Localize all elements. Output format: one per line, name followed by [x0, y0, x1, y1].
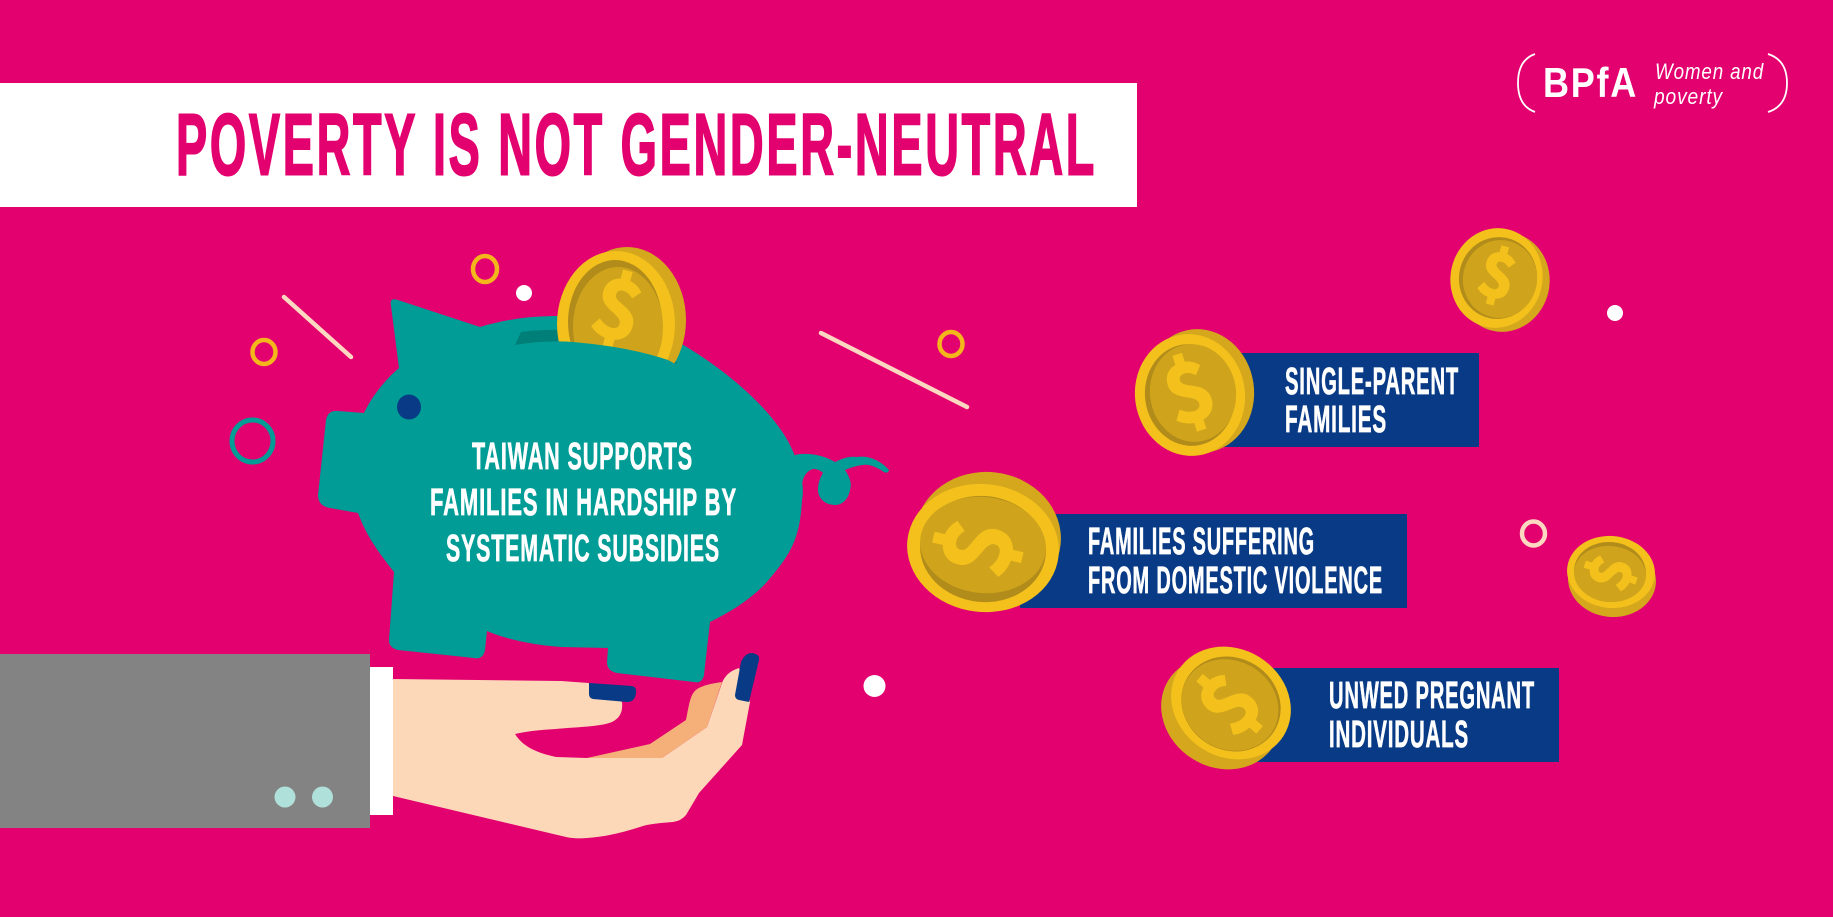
- fingernail 2: [735, 653, 759, 702]
- logo: BPfA Women and poverty: BPfA: [1543, 59, 1638, 106]
- text: [1285, 361, 1459, 441]
- pig front lip over coin: [500, 341, 700, 420]
- pig label text: [430, 436, 737, 570]
- logo: BPfA Women and poverty: [1518, 54, 1787, 112]
- hand holding the pig: [0, 653, 759, 838]
- piggy bank: [318, 242, 889, 682]
- pig eye: [397, 394, 421, 420]
- coin: [1140, 624, 1312, 792]
- coin: [1127, 322, 1262, 463]
- blue box: [1215, 353, 1479, 447]
- text: FAMILIES: [1285, 399, 1387, 441]
- coin: [901, 465, 1067, 620]
- decorative rings, dots and lines: [232, 256, 1623, 697]
- palm shadow: [587, 682, 722, 758]
- text: FROM DOMESTIC VIOLENCE: [1088, 560, 1383, 602]
- sleeve: [0, 654, 370, 828]
- text: INDIVIDUALS: [1329, 714, 1469, 756]
- pig label text: TAIWAN SUPPORTS: [472, 436, 693, 478]
- pig tail: [780, 454, 889, 510]
- coin entering slot: $: [581, 242, 657, 366]
- coin: lower right: [1564, 532, 1659, 621]
- pig coin slot: [515, 330, 677, 364]
- text: [1088, 521, 1383, 602]
- label: unwed pregnant individuals: [1140, 624, 1559, 792]
- coin entering slot: [557, 242, 686, 397]
- label: families suffering from domestic violence: [901, 465, 1407, 620]
- coin: top right: [1441, 220, 1559, 340]
- pig label text: SYSTEMATIC SUBSIDIES: [446, 528, 720, 570]
- text: [1329, 675, 1535, 756]
- label: single-parent families: [1127, 322, 1479, 463]
- text: FAMILIES SUFFERING: [1088, 521, 1315, 563]
- logo: BPfA Women and poverty: poverty: [1653, 84, 1724, 109]
- coin: $: [901, 505, 1043, 587]
- pig body: [318, 299, 803, 682]
- text: SINGLE-PARENT: [1285, 361, 1459, 403]
- blue box: [1020, 514, 1407, 608]
- logo: BPfA Women and poverty: Women and: [1655, 59, 1764, 84]
- fingernail 1: [589, 683, 636, 702]
- coin: lower right: $: [1564, 544, 1649, 599]
- shirt cuff: [370, 667, 393, 815]
- coin: top right: $: [1470, 225, 1527, 318]
- coin: $: [1147, 325, 1228, 450]
- title banner: [0, 83, 1137, 207]
- hand: [393, 668, 750, 838]
- text: UNWED PREGNANT: [1329, 675, 1535, 717]
- blue box: [1255, 668, 1559, 762]
- coin: $: [1166, 645, 1285, 756]
- sleeve buttons: [274, 786, 333, 808]
- pig label text: FAMILIES IN HARDSHIP BY: [430, 482, 737, 524]
